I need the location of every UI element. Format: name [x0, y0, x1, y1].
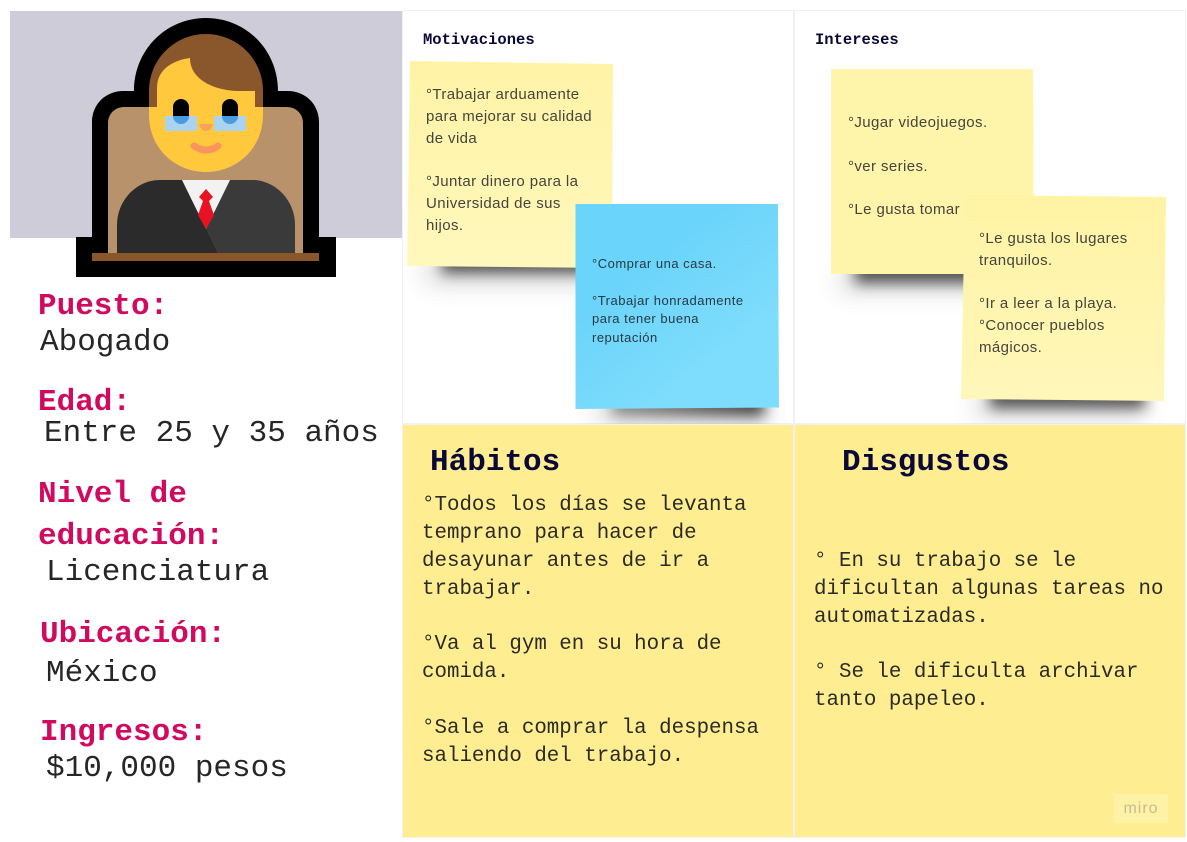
- panel: Intereses: [794, 10, 1186, 424]
- logo: miro watermark: [1114, 794, 1168, 823]
- label: Edad: Edad:: [38, 385, 131, 420]
- value: income: $10,000 pesos: [46, 751, 288, 786]
- value: Licenciatura: Licenciatura: [46, 555, 269, 590]
- logo: miro watermark: miro: [1123, 800, 1159, 817]
- text block: habits list: °Todos los días se levanta temprano para hacer de desayunar antes de ir a trabajar. °Va al gym en su hora de comida. °Sale a comprar la despensa saliendo del trabajo.: [422, 494, 759, 768]
- value: Abogado: Abogado: [40, 325, 170, 360]
- panel: Motivaciones: [402, 10, 794, 424]
- panel: Disgustos: [794, 424, 1186, 838]
- heading: Motivaciones: Motivaciones: [423, 31, 535, 49]
- sticky note: yellow motivations: [407, 61, 613, 292]
- value: México: México: [46, 656, 158, 691]
- text: blue note content: °Comprar una casa. °Trabajar honradamente para tener buena reputación: [592, 256, 744, 345]
- label: Ingresos: Ingresos:: [40, 715, 207, 750]
- label: Nivel de educación: Nivel de educación:: [38, 477, 224, 554]
- text block: dislikes list: ° En su trabajo se le dificultan algunas tareas no automatizadas. ° Se le dificulta archivar tanto papeleo.: [814, 550, 1163, 712]
- text: motivation notes: °Trabajar arduamente para mejorar su calidad de vida °Juntar dinero para la Universidad de sus hijos.: [426, 86, 592, 234]
- sticky note: yellow interests front: [961, 196, 1166, 424]
- label: Ubicación: Ubicación:: [40, 617, 226, 652]
- label: Puesto: Puesto:: [38, 289, 168, 324]
- sticky note: blue motivations: [576, 204, 779, 424]
- heading: Disgustos: Disgustos: [842, 445, 1009, 480]
- text block: profile details: [38, 289, 379, 786]
- sticky note: yellow interests back: [831, 69, 1034, 300]
- text: interests notes: °Jugar videojuegos. °ver series. °Le gusta tomar: [848, 114, 988, 218]
- heading: Hábitos: Hábitos: [430, 445, 560, 480]
- text: front interests content: °Le gusta los lugares tranquilos. °Ir a leer a la playa. °Conocer pueblos mágicos.: [979, 230, 1128, 356]
- heading: Intereses: Intereses: [815, 31, 899, 49]
- value: age range: Entre 25 y 35 años: [44, 416, 379, 451]
- icon: lawyer avatar: [76, 18, 336, 277]
- panel: Hábitos: [402, 424, 794, 838]
- panel: avatar background: [10, 11, 402, 238]
